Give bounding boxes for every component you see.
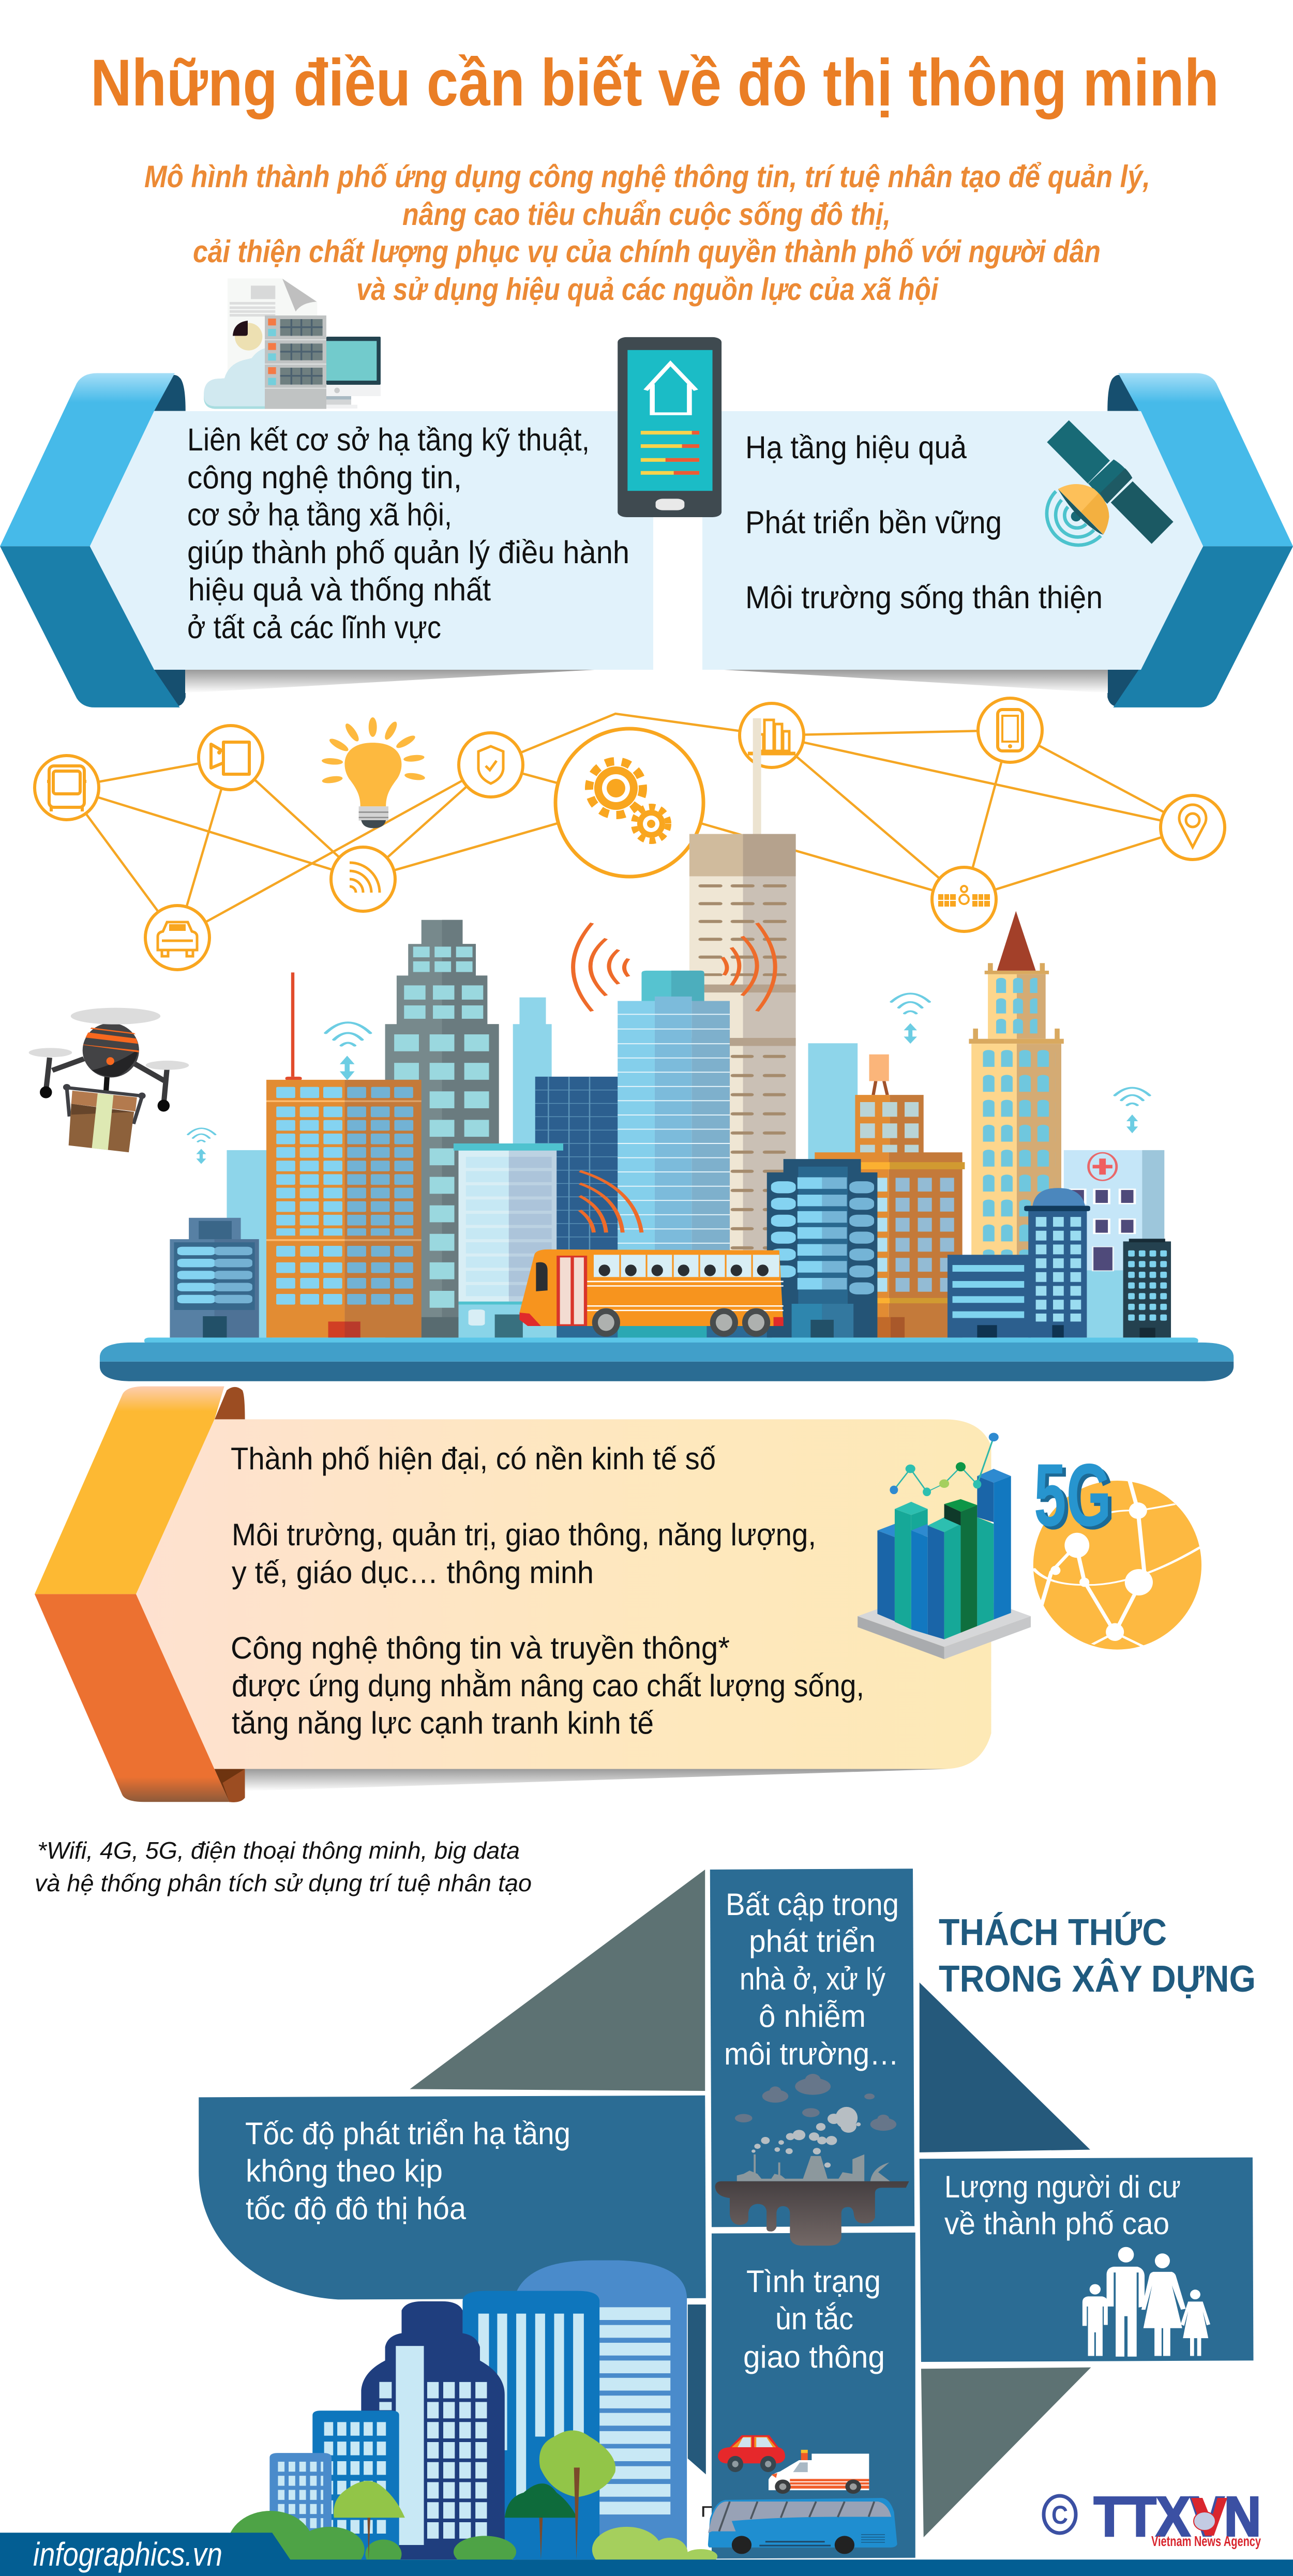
text: digital economy: y tế, giáo dục… thông minh: [232, 1555, 594, 1590]
icon: family: [1082, 2247, 1210, 2357]
text: traffic challenge: Tình trạng: [746, 2264, 881, 2299]
heading: challenges: THÁCH THỨC: [939, 1911, 1167, 1953]
back light buildings: [227, 1150, 272, 1337]
text: digital economy: Môi trường, quản trị, giao thông, năng lượng,: [232, 1517, 816, 1552]
small left building: [189, 1218, 241, 1240]
bus: [519, 1249, 784, 1326]
text: migration challenge: về thành phố cao: [944, 2206, 1169, 2241]
folds: [215, 1387, 245, 1420]
ambulance: [801, 2450, 808, 2461]
trees: [367, 2499, 544, 2559]
text: infrastructure challenge: không theo kịp: [246, 2153, 443, 2188]
panel body: [136, 1419, 991, 1769]
text: right panel: Phát triển bền vững: [745, 505, 1002, 540]
icon: globe network: [1033, 1481, 1201, 1650]
orange building left: [292, 972, 294, 1077]
city illustration: [100, 718, 1234, 1381]
node: phone: [978, 698, 1042, 762]
subtitle: Mô hình thành phố ứng dụng công nghệ thông tin, trí tuệ nhân tạo để quản lý,: [144, 159, 1150, 194]
right ribbon: [1107, 373, 1293, 707]
platform: [144, 1337, 1198, 1344]
node: shield: [459, 733, 523, 797]
text: infrastructure challenge: [245, 2116, 570, 2226]
subtitle: nâng cao tiêu chuẩn cuộc sống đô thị,: [402, 197, 891, 232]
node: wifi: [331, 847, 395, 911]
text: pollution challenge: ô nhiễm: [759, 1999, 866, 2033]
text: left panel: ở tất cả các lĩnh vực: [187, 610, 441, 645]
icon: delivery drone: [29, 1008, 189, 1152]
arcs on dark building: [580, 1171, 641, 1232]
node: bus: [35, 756, 99, 820]
orange arcs around tower: [573, 923, 775, 1011]
light blue tower: [515, 2261, 687, 2559]
left ribbon: [0, 373, 186, 707]
text: right panel: [745, 430, 1103, 615]
text: right panel: Môi trường sống thân thiện: [745, 580, 1103, 615]
tan tower: [753, 718, 761, 835]
node: city: [740, 703, 804, 767]
text: left panel: Liên kết cơ sở hạ tầng kỹ thuật,: [187, 422, 590, 457]
navy tower: [361, 2301, 505, 2559]
dark blue glass building: [535, 1077, 619, 1337]
text: traffic challenge: ùn tắc: [775, 2301, 853, 2336]
line: [894, 1437, 994, 1492]
dome tower: [1028, 1210, 1087, 1337]
bushes: [228, 2511, 516, 2576]
text: left panel: cơ sở hạ tầng xã hội,: [187, 497, 452, 532]
text: pollution challenge: [724, 1887, 899, 2071]
shadow: [245, 1769, 949, 1791]
gray tower: [385, 920, 499, 1337]
icon: 5G label: 5G: [1038, 1449, 1115, 1548]
central lower: [558, 1268, 772, 1337]
footnote: [35, 1837, 532, 1896]
text: pollution challenge: môi trường…: [724, 2037, 899, 2071]
text: left panel: [187, 422, 629, 645]
footnote: *Wifi, 4G, 5G, điện thoại thông minh, big data: [37, 1837, 520, 1864]
text: pollution challenge: Bất cập trong: [726, 1887, 899, 1922]
lower band: [35, 1594, 229, 1802]
hospital: [1064, 1150, 1142, 1337]
text: digital economy: [231, 1441, 864, 1740]
footer source: infographics.vn: [33, 2536, 222, 2573]
heading: challenges: [939, 1911, 1256, 2000]
car: [718, 2435, 785, 2463]
bars: [877, 1530, 895, 1621]
subtitle: và sử dụng hiệu quả các nguồn lực của xã hội: [356, 272, 939, 307]
small blue: [312, 2411, 399, 2559]
dark building: [1123, 1241, 1171, 1337]
right light panel: [702, 411, 1203, 670]
icon: 5G label: [1034, 1445, 1115, 1548]
icon: traffic vehicles: [703, 2435, 897, 2554]
large right orange building: [815, 1152, 889, 1337]
left light panel: [90, 411, 653, 670]
icon: pollution: [715, 2074, 909, 2246]
text: traffic challenge: giao thông: [743, 2340, 885, 2374]
yellow clock tower: [997, 911, 1036, 971]
text: left panel: hiệu quả và thống nhất: [188, 572, 491, 607]
text: digital economy: được ứng dụng nhằm nâng cao chất lượng sống,: [232, 1668, 864, 1703]
subtitle: cải thiện chất lượng phục vụ của chính quyền thành phố với người dân: [193, 234, 1101, 269]
right orange tower: [873, 1081, 888, 1095]
footer bar: [0, 2533, 1293, 2576]
node: gears: [555, 729, 703, 877]
node: satellite: [932, 867, 996, 931]
panel: challenges shapes: [199, 1869, 1253, 2558]
icon: documents, server and cloud: [204, 278, 381, 409]
pale building: [458, 1150, 509, 1337]
text: traffic challenge: [743, 2264, 885, 2374]
icon: smartphone with home: [618, 337, 721, 517]
illustration: blue city with trees: [228, 2261, 717, 2576]
network diagram: [35, 698, 1225, 970]
text: left panel: giúp thành phố quản lý điều hành: [187, 535, 629, 570]
node: camera: [199, 726, 263, 790]
text: migration challenge: Lượng người di cư: [944, 2170, 1181, 2204]
icon: 5G label: 5G: [1034, 1445, 1111, 1545]
heading: challenges: TRONG XÂY DỰNG: [939, 1958, 1256, 2000]
text: migration challenge: [944, 2170, 1181, 2241]
text: digital economy: tăng năng lực cạnh tranh kinh tế: [232, 1706, 654, 1740]
smaller blue: [269, 2453, 332, 2545]
node: car: [145, 906, 209, 970]
text: infrastructure challenge: Tốc độ phát triển hạ tầng: [245, 2116, 570, 2151]
panel: digital economy ribbon: [35, 1387, 991, 1802]
text: pollution challenge: nhà ở, xử lý: [740, 1962, 885, 1996]
text: infrastructure challenge: tốc độ đô thị hóa: [246, 2191, 467, 2226]
text: right panel: Hạ tầng hiệu quả: [745, 430, 967, 465]
base: [858, 1585, 1031, 1647]
shadows under panels: [185, 670, 595, 693]
icon: satellite: [1047, 420, 1174, 545]
central glass tower: [641, 971, 704, 1001]
text: pollution challenge: phát triển: [749, 1924, 876, 1959]
node: pin: [1161, 795, 1225, 860]
network lines: [67, 714, 1193, 938]
logo: TTXVN: TTXVN: [1094, 2485, 1261, 2548]
panel: top ribbon and light panels: [0, 373, 1293, 707]
icon: light bulb: [320, 717, 427, 828]
text: digital economy: Thành phố hiện đại, có nền kinh tế số: [231, 1441, 716, 1476]
logo: TTXVN: C: [1051, 2500, 1068, 2529]
text: left panel: công nghệ thông tin,: [187, 460, 462, 495]
icon: isometric bar chart: [858, 1433, 1031, 1659]
upper band: [35, 1387, 224, 1594]
text: digital economy: Công nghệ thông tin và truyền thông*: [231, 1631, 730, 1665]
low blue building: [948, 1255, 1031, 1337]
subtitle: [144, 159, 1150, 307]
blue tower: [462, 2291, 599, 2559]
footnote: và hệ thống phân tích sử dụng trí tuệ nhân tạo: [35, 1870, 532, 1896]
bus: [708, 2498, 897, 2548]
icon: wifi signals: [188, 993, 1150, 1164]
blue rounded window building: [767, 1159, 877, 1337]
